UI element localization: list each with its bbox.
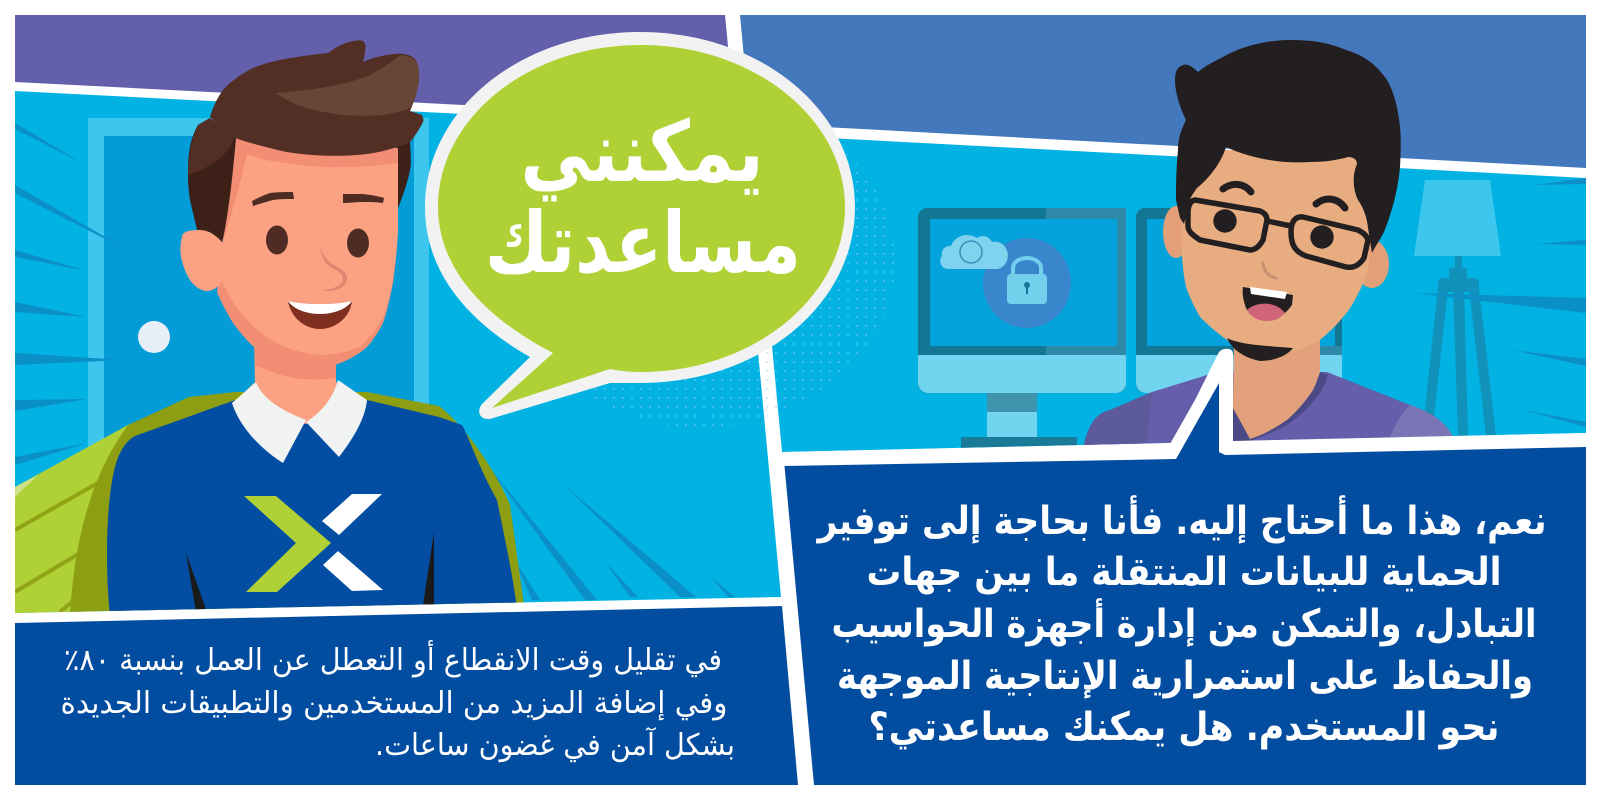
bubble text: يمكنني — [520, 103, 764, 202]
eyes — [266, 226, 288, 254]
text: right speech: نحو المستخدم. هل يمكنك مساعدتي؟ — [868, 705, 1500, 750]
text: right speech: الحماية للبيانات المنتقلة ما بين جهات — [866, 550, 1502, 595]
speech bubble: مساعدتك — [485, 194, 801, 292]
mouth — [288, 301, 352, 329]
sweater logo — [244, 494, 383, 592]
front hair — [210, 40, 423, 156]
nose — [320, 247, 347, 291]
panel: left sky scene — [15, 91, 781, 613]
eyebrows — [1223, 184, 1345, 208]
mouth — [1243, 287, 1293, 321]
text: left caption: بشكل آمن في غضون ساعات. — [375, 727, 735, 763]
icon: second monitor — [1136, 208, 1342, 393]
ear — [180, 230, 223, 291]
sweater — [107, 400, 518, 615]
hair — [1175, 40, 1401, 253]
ears — [1163, 206, 1189, 258]
goatee — [1227, 338, 1293, 361]
speech bubble — [425, 32, 855, 419]
icon: first monitor with cloud and lock — [918, 208, 1126, 450]
face — [217, 138, 398, 368]
shirt collar band — [1233, 372, 1328, 441]
icon: floor lamp — [1414, 180, 1501, 436]
panel: left blue caption background — [15, 606, 798, 785]
panel: right sky scene — [752, 134, 1586, 452]
neck — [1233, 340, 1320, 439]
text: right speech — [816, 495, 1546, 750]
collar — [232, 380, 367, 463]
glasses — [1188, 200, 1368, 267]
back hair — [188, 118, 240, 242]
text: left caption: في تقليل وقت الانقطاع أو التعطل عن العمل بنسبة ٨٠٪ — [64, 639, 722, 678]
neck — [232, 340, 367, 424]
sweater folds — [186, 532, 434, 612]
face — [1181, 150, 1369, 362]
shirt — [1083, 372, 1455, 450]
character: man with glasses — [1083, 40, 1455, 450]
panel: right blue speech box with tail — [782, 349, 1586, 785]
panel: right blue header — [740, 15, 1586, 168]
nose — [1263, 263, 1276, 278]
character: man in blue sweater — [15, 340, 524, 615]
door — [88, 118, 429, 466]
halftone dots behind bubble — [505, 97, 895, 427]
chair — [15, 392, 524, 615]
eyebrows — [252, 192, 294, 206]
panel: left purple header — [15, 15, 735, 119]
text: left caption: وفي إضافة المزيد من المستخدمين والتطبيقات الجديدة — [60, 686, 728, 721]
text: left caption — [60, 639, 735, 763]
eyes — [1213, 209, 1237, 233]
man head — [180, 40, 423, 368]
